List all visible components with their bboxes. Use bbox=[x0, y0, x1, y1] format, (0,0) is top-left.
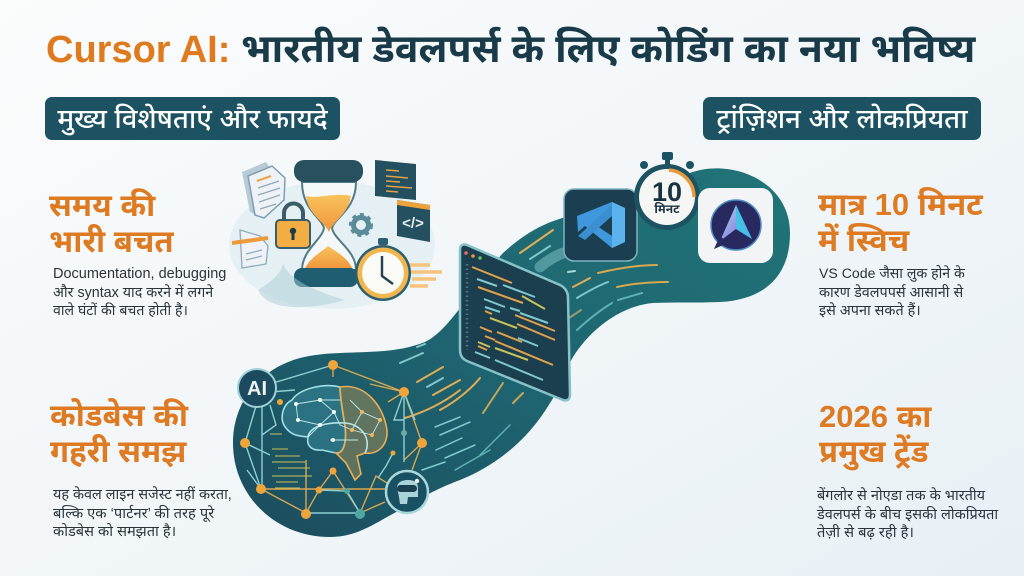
block: 10 minute switch: इसे अपना सकते हैं। bbox=[819, 301, 921, 319]
central ribbon bbox=[233, 168, 790, 537]
block: codebase understanding: कोडबेस को समझता है। bbox=[53, 522, 176, 540]
icon: second document bbox=[232, 230, 268, 268]
icon: code window upper bbox=[375, 160, 416, 200]
badge: AI bbox=[238, 369, 276, 407]
block: 10 minute switch bbox=[818, 187, 984, 319]
title: Cursor AI: भारतीय डेवलपर्स के लिए कोडिंग का नया भविष्य bbox=[46, 26, 976, 71]
block: 2026 trend: प्रमुख ट्रेंड bbox=[819, 434, 930, 471]
block: 10 minute switch: मात्र 10 मिनट bbox=[818, 187, 984, 222]
block: 2026 trend: 2026 का bbox=[819, 399, 932, 434]
block: codebase understanding bbox=[50, 398, 232, 540]
icon: clock bbox=[355, 238, 442, 301]
ribbon code streaks bbox=[400, 230, 668, 470]
icon: hourglass bbox=[294, 160, 363, 287]
block: 10 minute switch: VS Code जैसा लुक होने के bbox=[819, 264, 966, 283]
icon: hourglass cluster bbox=[229, 160, 442, 309]
icon: VS Code bbox=[564, 189, 637, 261]
icon: gear bbox=[350, 214, 372, 236]
network lines bbox=[245, 365, 422, 513]
block: codebase understanding: कोडबेस की bbox=[50, 398, 189, 433]
badge: AI: AI bbox=[247, 378, 267, 400]
heading: right transition bbox=[703, 97, 981, 140]
heading: left features bbox=[45, 97, 340, 140]
block: time saving: Documentation, debugging bbox=[53, 266, 226, 282]
icon: code window lower: </> bbox=[402, 215, 424, 232]
block: 2026 trend: तेज़ी से बढ़ रही है। bbox=[817, 523, 914, 541]
heading: right transition: ट्रांज़िशन और लोकप्रियता bbox=[716, 103, 968, 134]
block: time saving: वाले घंटों की बचत होती है। bbox=[53, 301, 188, 318]
icon: documents bbox=[242, 162, 285, 218]
icon: padlock bbox=[276, 204, 310, 248]
icon: 10 minute stopwatch: मिनट bbox=[654, 201, 680, 216]
block: time saving: भारी बचत bbox=[49, 224, 174, 259]
block: codebase understanding: गहरी समझ bbox=[50, 434, 187, 469]
icon: 10 minute stopwatch bbox=[634, 152, 700, 230]
icon: Cursor logo bbox=[698, 188, 773, 263]
icon: swirl bbox=[258, 263, 345, 307]
code editor panel bbox=[460, 245, 570, 400]
block: time saving bbox=[49, 188, 226, 318]
heading: left features: मुख्य विशेषताएं और फायदे bbox=[57, 103, 329, 136]
block: codebase understanding: यह केवल लाइन सजेस्ट नहीं करता, bbox=[53, 485, 232, 503]
icon: code window lower bbox=[397, 200, 430, 242]
network nodes bbox=[240, 360, 427, 519]
icon: brain network bbox=[238, 360, 428, 519]
block: 2026 trend: डेवलपर्स के बीच इसकी लोकप्रियता bbox=[816, 505, 998, 523]
block: 10 minute switch: कारण डेवलपपर्स आसानी से bbox=[819, 283, 963, 301]
block: 2026 trend: बेंगलोर से नोएडा तक के भारतीय bbox=[817, 486, 986, 504]
small code lines bbox=[270, 434, 312, 488]
block: time saving: और syntax याद करने में लगने bbox=[53, 283, 214, 301]
badge: robot bbox=[386, 471, 428, 513]
block: 2026 trend bbox=[816, 399, 998, 541]
block: time saving: समय की bbox=[49, 188, 156, 223]
brain bbox=[282, 386, 387, 480]
icon: 10 minute stopwatch: 10 bbox=[652, 177, 682, 207]
block: codebase understanding: बल्कि एक ‘पार्टनर’ की तरह पूरे bbox=[53, 504, 215, 523]
block: 10 minute switch: में स्विच bbox=[818, 223, 910, 258]
